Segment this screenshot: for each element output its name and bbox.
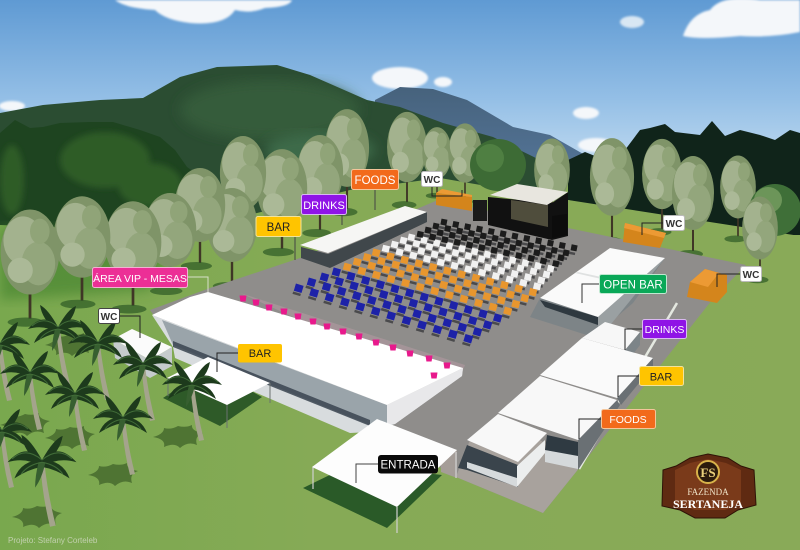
label: ÁREA VIP - MESAS [92, 268, 208, 292]
seating area [289, 221, 580, 346]
label: DRINKS top [302, 194, 346, 225]
logo: Fazenda Sertaneja: SERTANEJA [673, 497, 743, 511]
right pine forest [568, 121, 800, 235]
label: OPEN BAR [582, 274, 666, 303]
label: DRINKS top: DRINKS [303, 200, 345, 212]
white walkway right [579, 303, 677, 469]
paved area [150, 200, 746, 513]
label: BAR middle [217, 344, 282, 372]
back mountain [375, 87, 585, 180]
label: WC right: WC [743, 270, 759, 281]
logo: Fazenda Sertaneja: FS [700, 465, 716, 480]
tent: bar right [540, 338, 653, 405]
sky [0, 0, 800, 180]
VIP tent [152, 292, 465, 433]
logo: Fazenda Sertaneja: FAZENDA [687, 487, 729, 497]
label: WC left: WC [101, 312, 117, 323]
label: ÁREA VIP - MESAS: ÁREA VIP - MESAS [93, 272, 187, 285]
label: FOODS top [352, 170, 398, 210]
black seats [414, 221, 580, 265]
label: FOODS right: FOODS [609, 414, 647, 426]
blue seats [291, 270, 505, 341]
left forest [0, 120, 235, 235]
tent: top left [300, 206, 427, 268]
white seats [379, 236, 557, 288]
WC tent, left [113, 329, 172, 378]
label: BAR top [256, 216, 301, 260]
stage [473, 184, 568, 240]
label: OPEN BAR: OPEN BAR [603, 280, 663, 292]
label: WC right [717, 266, 762, 287]
seat shadows [289, 226, 578, 346]
orange cabins, far right [687, 269, 727, 303]
VIP pink tables [240, 296, 450, 378]
label: FOODS right [579, 410, 656, 439]
trees behind the venue [1, 109, 800, 327]
label: WC left [98, 308, 140, 338]
label: BAR right [618, 366, 684, 397]
orange cabins, right [623, 223, 666, 248]
logo: Fazenda Sertaneja [662, 454, 756, 518]
lawn [0, 178, 800, 550]
credit text: Projeto: Stefany Corteleb [8, 536, 98, 545]
tent: foods right [498, 376, 620, 470]
label: FOODS top: FOODS [355, 175, 396, 187]
label: BAR right: BAR [650, 372, 672, 384]
label: WC top: WC [424, 175, 440, 186]
label: WC top [422, 172, 462, 196]
Entrada tent [303, 419, 457, 533]
BAR tent [163, 357, 270, 428]
palm trees [0, 305, 222, 528]
orange seats [340, 251, 540, 313]
label: ENTRADA: ENTRADA [381, 460, 436, 472]
label: DRINKS right: DRINKS [645, 324, 684, 336]
label: BAR middle: BAR [249, 348, 271, 360]
label: DRINKS right [625, 320, 686, 350]
label: ENTRADA [356, 455, 438, 483]
main mountain [0, 65, 540, 220]
tent: small right [458, 414, 547, 487]
tent: open bar [530, 248, 665, 340]
orange cabins, stage side [436, 189, 472, 211]
label: BAR top: BAR [267, 222, 290, 234]
tent: drinks right [582, 322, 640, 358]
clouds [0, 0, 800, 152]
label: WC top right [642, 216, 684, 235]
label: WC top right: WC [666, 219, 682, 230]
